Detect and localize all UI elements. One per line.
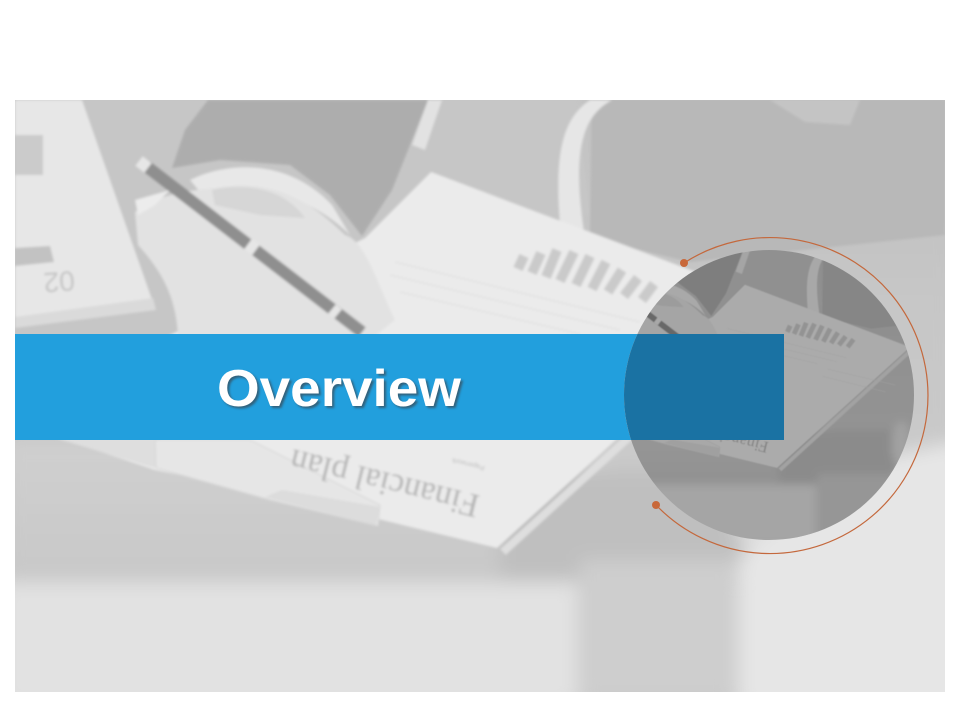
slide artwork: [15, 100, 945, 692]
blue title banner: [15, 334, 784, 440]
orange arc with end dots: [652, 238, 928, 554]
circular photo inset: [624, 250, 914, 540]
title: Overview: [217, 360, 461, 418]
